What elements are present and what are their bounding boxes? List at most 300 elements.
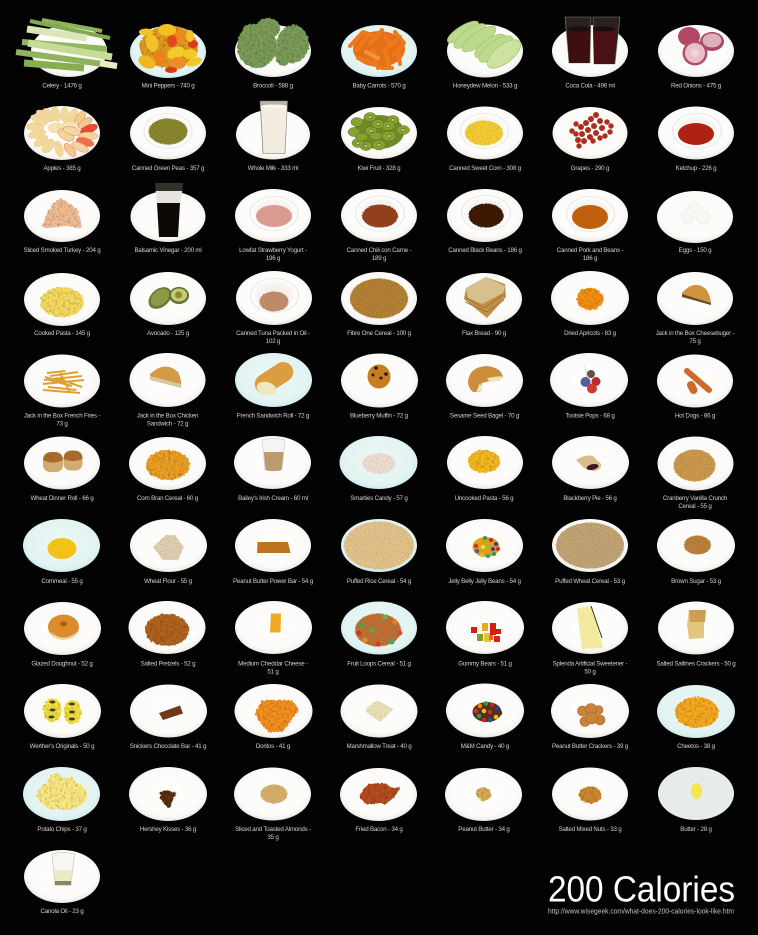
item: Fibre One Cereal	[341, 272, 417, 337]
caption line 2: 189 g	[372, 255, 387, 262]
plate	[446, 601, 524, 654]
food: fibre one cereal	[350, 278, 408, 318]
item: Werther's Originals	[24, 684, 101, 750]
plate	[236, 271, 312, 325]
item: Sliced and Toasted Almonds	[234, 768, 311, 841]
plate	[24, 354, 100, 408]
item: Grapes	[552, 107, 628, 172]
item: Puffed Rice Cereal	[341, 519, 417, 585]
item: Lowfat Strawberry Yogurt	[235, 189, 311, 262]
caption line 2: Cereal - 55 g	[678, 503, 712, 510]
caption: Salted Saltines Crackers - 50 g	[656, 660, 736, 668]
plate	[130, 26, 206, 78]
caption: Cornmeal - 55 g	[41, 578, 83, 585]
food: cheddar	[270, 614, 281, 632]
caption: Gummy Bears - 51 g	[458, 660, 512, 668]
plate	[24, 190, 100, 242]
item: Baby Carrots	[341, 25, 417, 90]
food: tootsie pops	[580, 363, 600, 394]
food: kiwi slices	[348, 112, 410, 150]
item: Canned Sweet Corn	[447, 106, 523, 172]
food: marshmallow treat	[366, 700, 394, 722]
item: Canned Tuna Packed in Oil	[236, 271, 312, 345]
food: corn bran cereal	[146, 450, 190, 480]
caption: Jack in the Box French Fries -	[24, 412, 100, 420]
bowl	[461, 195, 511, 231]
item: Blueberry Muffin	[341, 354, 418, 420]
plate	[235, 25, 311, 77]
item: Salted Saltines Crackers	[656, 602, 736, 668]
plate	[24, 436, 100, 490]
plate	[24, 273, 100, 326]
caption: Sliced and Toasted Almonds -	[235, 826, 311, 833]
item: Peanut Butter Crackers	[551, 684, 629, 750]
plate	[552, 107, 628, 159]
item: Balsamic Vinegar	[130, 183, 206, 254]
plate	[234, 684, 312, 738]
item: Blackberry Pie	[552, 436, 629, 502]
item: Broccoli	[235, 18, 311, 90]
item: Peanut Butter Power Bar	[233, 519, 314, 585]
food: uncooked pasta	[468, 450, 500, 473]
caption: Salted Mixed Nuts - 33 g	[559, 826, 622, 833]
plate	[447, 24, 523, 78]
food: hershey kisses	[160, 790, 176, 809]
item: Red Onions	[658, 25, 734, 90]
plate	[24, 106, 100, 160]
caption: Canned Chili con Carne -	[347, 247, 411, 254]
bowl	[250, 196, 298, 231]
food: avocado halves	[144, 283, 189, 313]
item: Wheat Dinner Roll	[24, 436, 100, 502]
bowl	[566, 196, 615, 232]
caption: Wheat Dinner Roll - 66 g	[31, 495, 94, 502]
caption: French Sandwich Roll - 72 g	[237, 412, 310, 420]
caption: Balsamic Vinegar - 200 ml	[134, 247, 202, 254]
caption: Hot Dogs - 66 g	[675, 412, 716, 420]
item: French Sandwich Roll	[235, 353, 312, 420]
plate	[657, 519, 735, 572]
item: Jack in the Box French Fries	[24, 354, 100, 428]
plate	[657, 191, 733, 243]
caption: Sesame Seed Bagel - 70 g	[450, 412, 520, 420]
plate	[658, 767, 734, 820]
caption: Tootsie Pops - 68 g	[565, 412, 615, 420]
item: Celery	[16, 20, 117, 90]
plate	[657, 685, 735, 738]
caption: Peanut Butter Crackers - 39 g	[552, 743, 629, 750]
plate	[130, 519, 207, 572]
caption: Canned Sweet Corn - 308 g	[449, 165, 522, 172]
caption: Uncooked Pasta - 56 g	[455, 495, 514, 502]
caption: Doritos - 41 g	[256, 743, 291, 750]
item: Hershey Kisses	[129, 767, 207, 833]
food: cheetos	[675, 697, 719, 728]
food: turkey	[41, 198, 82, 228]
food: puffed wheat	[556, 522, 624, 568]
food: cranberry crunch cereal	[674, 450, 716, 482]
caption: Butter - 28 g	[680, 826, 712, 833]
caption line 2: 102 g	[266, 338, 281, 345]
item: Glazed Doughnut	[24, 602, 101, 668]
plate	[446, 354, 523, 407]
food: baby carrots	[350, 30, 405, 68]
food: broccoli	[237, 18, 309, 68]
plate	[235, 601, 312, 654]
caption: Flax Bread - 90 g	[462, 330, 507, 337]
caption: Cranberry Vanilla Crunch	[663, 495, 728, 502]
plate	[552, 25, 628, 77]
food: mini peppers	[136, 24, 203, 73]
food: eggs	[681, 202, 710, 224]
food: glass of vinegar	[155, 183, 183, 237]
caption: Wheat Flour - 55 g	[144, 578, 193, 585]
item: Eggs	[657, 191, 733, 254]
food: potato chips	[37, 774, 87, 810]
plate	[445, 768, 522, 821]
plate	[550, 353, 628, 407]
caption: Broccoli - 588 g	[253, 82, 294, 90]
item: Gummy Bears	[446, 601, 524, 668]
food: snickers bar	[159, 706, 183, 720]
food: bacon	[359, 783, 401, 804]
plate	[236, 110, 310, 160]
item: Avocado	[130, 272, 206, 337]
item: Potato Chips	[23, 767, 100, 833]
plate	[446, 273, 522, 325]
item: Smarties Candy	[340, 436, 418, 502]
food: mixed nuts	[578, 786, 602, 804]
food: doughnut	[48, 614, 79, 640]
item: Cornmeal	[23, 519, 100, 585]
plate	[130, 106, 206, 160]
caption line 2: Sandwich - 72 g	[147, 420, 189, 428]
plate	[129, 437, 206, 490]
plate	[23, 519, 100, 572]
plate	[340, 768, 417, 821]
food: smarties	[362, 453, 396, 474]
plate	[552, 602, 628, 654]
caption: Fried Bacon - 34 g	[355, 826, 403, 833]
caption: Canned Tuna Packed in Oil -	[236, 330, 310, 337]
food: celery	[16, 20, 117, 68]
caption: Coca Cola - 496 ml	[565, 82, 615, 90]
item: Uncooked Pasta	[447, 436, 523, 502]
food: saltine stack	[687, 610, 706, 639]
plate	[657, 272, 733, 325]
caption: Hershey Kisses - 36 g	[140, 826, 197, 833]
item: Canola Oil	[24, 850, 100, 915]
item: Brown Sugar	[657, 519, 735, 585]
caption: Eggs - 150 g	[679, 247, 712, 254]
caption: Medium Cheddar Cheese -	[238, 660, 308, 668]
caption: Ketchup - 226 g	[676, 165, 717, 172]
caption: Blackberry Pie - 56 g	[563, 495, 617, 502]
plate	[130, 191, 206, 242]
plate	[446, 519, 523, 572]
caption: Mini Peppers - 740 g	[141, 82, 195, 90]
item: Splenda Artificial Sweetener	[552, 602, 628, 676]
bowl	[460, 113, 509, 149]
caption: Salted Pretzels - 52 g	[141, 660, 196, 668]
item: M&M Candy	[446, 684, 524, 750]
caption: Corn Bran Cereal - 60 g	[137, 495, 199, 502]
food: glass of oil	[52, 852, 74, 886]
food: glass of milk	[260, 101, 288, 154]
caption: Puffed Wheat Cereal - 53 g	[555, 578, 626, 585]
caption: Jack in the Box Cheesebuger -	[656, 330, 735, 337]
caption: Canned Black Beans - 186 g	[448, 247, 523, 254]
plate	[657, 354, 733, 408]
food: dinner rolls	[43, 450, 82, 472]
food: splenda packets	[577, 606, 603, 649]
food: yogurt	[256, 205, 292, 227]
plate	[235, 519, 311, 572]
plate	[447, 106, 523, 160]
item: Sliced Smoked Turkey	[24, 190, 101, 254]
item: Canned Green Peas	[130, 106, 206, 172]
food: doritos	[255, 700, 299, 732]
food: almonds	[260, 784, 288, 804]
item: Apples	[24, 105, 100, 172]
caption: Potato Chips - 37 g	[37, 826, 87, 833]
food: glasses of cola	[565, 17, 620, 64]
plate	[552, 436, 629, 489]
food: pork and beans	[572, 205, 608, 229]
item: Cooked Pasta	[24, 273, 100, 337]
plate	[551, 684, 629, 738]
caption: Grapes - 290 g	[571, 165, 610, 172]
plate	[658, 25, 734, 77]
food: pretzels	[145, 614, 189, 646]
bowl	[144, 113, 192, 149]
plate	[551, 271, 629, 325]
plate	[24, 850, 100, 903]
plate	[234, 768, 311, 820]
food: glass of Bailey's	[262, 438, 285, 471]
food: apricots	[576, 288, 604, 310]
caption: Red Onions - 475 g	[671, 82, 722, 90]
caption: Blueberry Muffin - 72 g	[350, 412, 409, 420]
item: Wheat Flour	[130, 519, 207, 585]
caption: Bailey's Irish Cream - 60 ml	[238, 495, 308, 502]
item: Whole Milk	[236, 101, 310, 172]
item: Kiwi Fruit	[341, 107, 417, 172]
food: chicken sandwich	[150, 366, 181, 388]
food: cheeseburger	[682, 285, 711, 305]
food: butter	[691, 783, 702, 799]
food: hot dogs	[687, 371, 709, 390]
plate	[340, 684, 418, 738]
caption: Snickers Chocolate Bar - 41 g	[130, 743, 207, 750]
item: Jack in the Box Chicken Sandwich	[130, 353, 206, 428]
caption line 2: 51 g	[267, 668, 279, 676]
caption: Glazed Doughnut - 52 g	[31, 660, 93, 668]
plate	[130, 684, 207, 738]
plate	[130, 353, 206, 407]
item: Salted Mixed Nuts	[552, 768, 628, 833]
plate	[446, 684, 524, 738]
plate	[447, 436, 523, 489]
item: Butter	[658, 767, 734, 833]
bowl	[355, 196, 405, 232]
caption line 2: 35 g	[267, 834, 279, 841]
item: Honeydew Melon	[445, 17, 525, 89]
item: Ketchup	[658, 106, 734, 172]
plate	[552, 189, 628, 242]
source url: http://www.wisegeek.com/what-does-200-calories-look-like.htm	[548, 908, 734, 916]
plate	[235, 353, 312, 407]
food: black beans	[468, 204, 504, 228]
caption: Avocado - 125 g	[147, 330, 190, 337]
caption: Whole Milk - 333 ml	[248, 165, 298, 172]
food: power bar	[257, 542, 290, 553]
plate	[340, 436, 418, 489]
food: fruit loops	[355, 614, 402, 646]
item: Canned Pork and Beans	[552, 189, 628, 262]
plate	[130, 272, 206, 325]
food: corn	[465, 120, 503, 146]
plate	[234, 436, 311, 489]
caption line 2: 73 g	[56, 420, 68, 428]
item: Corn Bran Cereal	[129, 437, 206, 502]
item: Puffed Wheat Cereal	[552, 519, 628, 585]
item: Jack in the Box Cheeseburger	[656, 272, 735, 345]
food: gummy bears	[471, 623, 501, 642]
caption: Celery - 1476 g	[42, 82, 82, 90]
food: puffed rice	[344, 522, 414, 570]
item: Dried Apricots	[551, 271, 629, 337]
item: Peanut Butter	[445, 768, 522, 833]
caption: Dried Apricots - 83 g	[564, 330, 617, 337]
caption: Werther's Originals - 50 g	[30, 743, 95, 750]
food: peanut butter	[476, 788, 491, 800]
item: Cheetos	[657, 685, 735, 750]
caption: Fruit Loops Cereal - 51 g	[347, 660, 411, 668]
plate	[552, 768, 628, 820]
caption: Peanut Butter - 34 g	[458, 826, 510, 833]
caption: Fibre One Cereal - 100 g	[347, 330, 412, 337]
caption: Splenda Artificial Sweetener -	[553, 660, 628, 668]
food: grapes	[569, 112, 614, 149]
food: brown sugar	[684, 536, 711, 554]
plate	[23, 767, 100, 821]
plate	[341, 519, 417, 572]
caption: Canola Oil - 23 g	[40, 908, 84, 915]
plate	[552, 519, 628, 572]
food: french roll	[251, 358, 297, 398]
plate	[128, 601, 206, 654]
caption line 2: 196 g	[266, 255, 281, 262]
caption line 2: 50 g	[584, 668, 596, 676]
bowl	[672, 113, 722, 149]
caption: Kiwi Fruit - 328 g	[358, 165, 401, 172]
item: Doritos	[234, 684, 312, 750]
food: blackberry pie	[576, 456, 601, 471]
item: Canned Chili con Carne	[341, 189, 417, 262]
food: tuna	[260, 292, 288, 312]
plate	[129, 767, 207, 821]
food: red onions	[678, 27, 724, 66]
caption: Cheetos - 38 g	[677, 743, 716, 750]
caption: Baby Carrots - 570 g	[352, 82, 406, 90]
item: Sesame Seed Bagel	[446, 354, 523, 420]
item: Hot Dogs	[657, 354, 733, 420]
food: honeydew melon	[445, 17, 525, 73]
plate	[341, 354, 418, 408]
item: Flax Bread	[446, 273, 522, 337]
food: bagel	[468, 366, 503, 393]
caption: Canned Pork and Beans -	[557, 247, 623, 254]
plate	[658, 602, 734, 654]
food: cornmeal	[48, 538, 76, 559]
plate	[658, 436, 734, 490]
title: 200 Calories	[548, 868, 735, 910]
item: Mini Peppers	[130, 24, 206, 90]
caption: Brown Sugar - 53 g	[671, 578, 722, 585]
plate	[235, 189, 311, 242]
food: crackers	[578, 704, 605, 726]
plate	[24, 684, 101, 738]
item: Salted Pretzels	[128, 601, 206, 668]
caption: Jack in the Box Chicken	[137, 412, 199, 420]
food: apple slices	[26, 105, 99, 159]
plate	[658, 106, 734, 160]
food: french fries	[43, 371, 84, 393]
item: Fried Bacon	[340, 768, 417, 833]
plate	[447, 189, 523, 242]
food: peas	[148, 118, 188, 144]
food: m&m candies	[472, 701, 502, 722]
food: chili	[362, 204, 398, 228]
plate	[341, 189, 417, 242]
caption: Cooked Pasta - 145 g	[34, 330, 91, 337]
caption: Puffed Rice Cereal - 54 g	[347, 578, 412, 585]
item: Jelly Belly Jelly Beans	[446, 519, 523, 585]
food: werther's candies	[44, 698, 82, 724]
food: blueberry muffin	[368, 364, 390, 388]
caption: M&M Candy - 40 g	[461, 743, 510, 750]
plate	[341, 602, 417, 654]
item: Coca Cola	[552, 17, 628, 90]
caption line 2: 186 g	[583, 255, 598, 262]
bowl	[250, 278, 299, 313]
caption: Canned Green Peas - 357 g	[132, 165, 205, 172]
food: cooked pasta	[40, 287, 84, 317]
caption: Apples - 385 g	[43, 165, 81, 172]
caption: Sliced Smoked Turkey - 204 g	[24, 247, 101, 254]
caption: Smarties Candy - 57 g	[350, 495, 408, 502]
food: wheat flour	[153, 535, 184, 560]
item: Snickers Chocolate Bar	[130, 684, 207, 750]
item: Bailey's Irish Cream	[234, 436, 311, 502]
item: Fruit Loops Cereal	[341, 602, 417, 668]
caption: Lowfat Strawberry Yogurt -	[239, 247, 307, 254]
caption: Jelly Belly Jelly Beans - 54 g	[448, 578, 521, 585]
plate	[341, 272, 417, 325]
plate	[341, 25, 417, 77]
food: ketchup	[678, 123, 714, 145]
plate	[31, 25, 107, 77]
caption: Marshmallow Treat - 40 g	[346, 743, 412, 750]
item: Marshmallow Treat	[340, 684, 418, 750]
item: Tootsie Pops	[550, 353, 628, 420]
item: Canned Black Beans	[447, 189, 523, 254]
item: Cranberry Vanilla Crunch Cereal	[658, 436, 734, 510]
food: jelly beans	[472, 536, 500, 558]
caption: Honeydew Melon - 533 g	[453, 82, 518, 90]
food: stack of flax bread	[464, 277, 506, 318]
